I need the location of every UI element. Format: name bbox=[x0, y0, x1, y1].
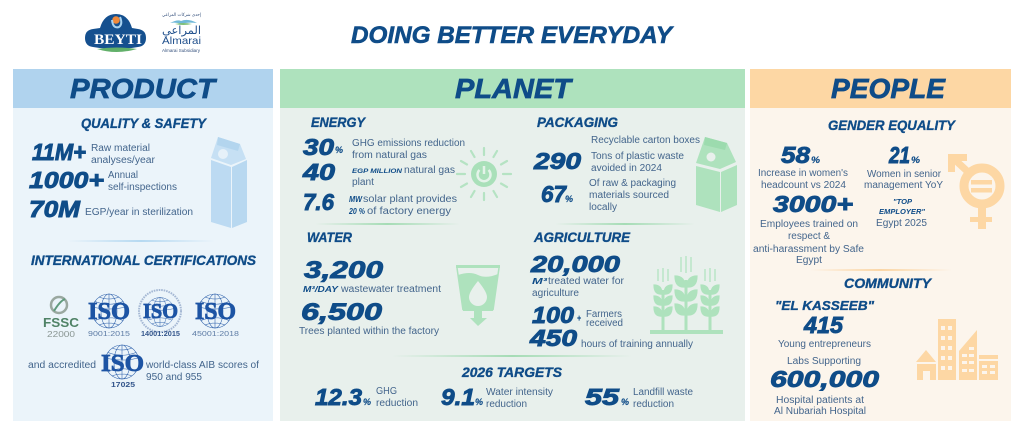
stat: 100+ bbox=[532, 302, 623, 329]
award: top employer: "TOP bbox=[893, 197, 913, 206]
stat: 3,200 bbox=[303, 257, 441, 295]
award: top employer: EMPLOYER" bbox=[879, 207, 925, 216]
stat: 7.6: of factory energy bbox=[367, 206, 451, 217]
certificate: ISO 45001 bbox=[192, 294, 239, 338]
stat: 7.6: solar plant provides bbox=[363, 194, 457, 205]
product header: PRODUCT bbox=[70, 73, 218, 104]
programme: El Kasseeb bbox=[775, 298, 875, 367]
certificate: ISO 45001: ISO bbox=[195, 299, 236, 325]
stat: 3,200: wastewater treatment bbox=[340, 284, 441, 295]
stat: 3000+: 3000+ bbox=[773, 191, 853, 217]
stat: 450: hours of training annually bbox=[581, 339, 693, 350]
target: water intensity bbox=[441, 384, 553, 410]
stat: 3,200: 3,200 bbox=[304, 257, 384, 284]
stat: 58%: 58 bbox=[781, 142, 810, 168]
stat: 40 bbox=[302, 159, 455, 188]
stat: 6,500 bbox=[299, 299, 439, 337]
stat: 21%: % bbox=[911, 155, 920, 165]
certificate: ISO 14001: 14001:2015 bbox=[141, 331, 180, 338]
people header bbox=[750, 69, 1011, 108]
heading: community: COMMUNITY bbox=[844, 276, 933, 291]
target: water intensity: reduction bbox=[486, 399, 527, 410]
stat: 290: avoided in 2024 bbox=[591, 163, 663, 174]
target: GHG bbox=[315, 384, 418, 410]
award: top employer bbox=[876, 197, 927, 229]
stat: 67%: % bbox=[565, 194, 573, 204]
logo: Beyti bbox=[85, 14, 146, 52]
text: AIB scores: world-class AIB scores of bbox=[145, 360, 259, 371]
heading: energy: ENERGY bbox=[311, 115, 367, 130]
stat: 21%: 21 bbox=[888, 142, 910, 168]
programme: El Kasseeb: Labs Supporting bbox=[787, 356, 861, 367]
stat: 20,000: treated water for bbox=[548, 276, 625, 287]
heading: agriculture: AGRICULTURE bbox=[533, 230, 631, 245]
panel: people bbox=[750, 69, 1011, 421]
stat: 58%: headcount vs 2024 bbox=[761, 180, 847, 191]
stat: 11M+: 11M+ bbox=[32, 139, 86, 165]
text: recyclable carton boxes: Recyclable carton boxes bbox=[591, 135, 700, 146]
target: landfill waste bbox=[585, 384, 693, 410]
certificate: ISO 14001 bbox=[139, 290, 181, 338]
stat: 450: 450 bbox=[529, 325, 577, 351]
stat: 30%: GHG emissions reduction bbox=[352, 138, 465, 149]
programme: El Kasseeb: 415 bbox=[803, 312, 844, 338]
stat: 30%: from natural gas bbox=[352, 150, 427, 161]
heading: water: WATER bbox=[307, 230, 352, 245]
target: landfill waste: % bbox=[621, 397, 629, 407]
stat: 3000+: anti-harassment by Safe bbox=[753, 244, 864, 255]
certificate: ISO 17025: ISO bbox=[101, 351, 144, 377]
stat: 67% bbox=[541, 178, 676, 213]
stat: 67%: locally bbox=[589, 202, 617, 213]
stat: 70M bbox=[29, 196, 193, 222]
award: top employer: Egypt 2025 bbox=[876, 218, 927, 229]
certificate: FSSC 22000: FSSC bbox=[43, 316, 79, 330]
stat: 20,000 bbox=[530, 251, 625, 299]
target: GHG: GHG bbox=[376, 386, 397, 397]
stat: 67%: Of raw & packaging bbox=[589, 178, 676, 189]
stat: 3000+: Egypt bbox=[796, 255, 822, 266]
title: DOING BETTER EVERYDAY bbox=[351, 22, 674, 49]
target: water intensity: % bbox=[475, 397, 483, 407]
panel: product bbox=[13, 69, 273, 421]
logo: Almarai: المراعي bbox=[162, 24, 201, 37]
logo: Almarai: إحدى شركات المراعي bbox=[162, 12, 201, 18]
stat: 67%: 67 bbox=[541, 181, 567, 207]
certificate: ISO 9001: 9001:2015 bbox=[88, 329, 130, 338]
stat: 290: Tons of plastic waste bbox=[591, 151, 684, 162]
stat: 21%: Women in senior bbox=[867, 169, 942, 180]
certificate: ISO 17025 bbox=[101, 345, 144, 389]
heading: 2026 targets: 2026 TARGETS bbox=[461, 365, 562, 380]
target: landfill waste: 55 bbox=[585, 384, 621, 410]
text: AIB scores bbox=[145, 360, 259, 383]
stat: 3000+ bbox=[753, 191, 864, 266]
icon: water cup bbox=[456, 265, 500, 326]
stat: 21% bbox=[864, 142, 944, 191]
programme: El Kasseeb: Young entrepreneurs bbox=[778, 339, 871, 350]
stat: 1000+: self-inspections bbox=[108, 182, 177, 193]
target: GHG: reduction bbox=[376, 398, 418, 409]
stat: 11M+: Raw material bbox=[91, 143, 150, 154]
logo: Beyti: BEYTI bbox=[94, 32, 142, 48]
logo: Almarai: Almarai bbox=[162, 35, 201, 47]
stat: 6,500: 6,500 bbox=[301, 299, 383, 326]
panel: planet bbox=[280, 69, 745, 421]
stat: 1000+ bbox=[29, 167, 177, 193]
icon: gender equality bbox=[948, 154, 1000, 229]
stat: 7.6: MW bbox=[349, 194, 363, 204]
stat: 40: plant bbox=[352, 177, 374, 188]
stat: 600,000 bbox=[770, 366, 879, 417]
icon: carton bbox=[696, 137, 737, 212]
heading: quality and safety: QUALITY & SAFETY bbox=[81, 116, 208, 131]
stat: 600,000: 600,000 bbox=[770, 366, 879, 392]
stat: 1000+: 1000+ bbox=[29, 167, 104, 193]
certificate: ISO 17025: 17025 bbox=[111, 380, 135, 389]
stat: 58%: Increase in women's bbox=[758, 168, 848, 179]
stat: 11M+: analyses/year bbox=[91, 155, 156, 166]
heading: packaging: PACKAGING bbox=[537, 115, 618, 130]
stat: 100+: + bbox=[577, 313, 582, 323]
stat: 58%: % bbox=[811, 155, 820, 165]
icon: milk carton bbox=[211, 137, 247, 228]
stat: 7.6 bbox=[303, 189, 457, 217]
heading: international certifications: INTERNATIONAL CERTIFICATIONS bbox=[31, 253, 256, 268]
stat: 67%: materials sourced bbox=[589, 190, 669, 201]
icon: wheat bbox=[650, 256, 723, 334]
target: water intensity: Water intensity bbox=[486, 387, 553, 398]
stat: 450 bbox=[529, 325, 693, 351]
target: landfill waste: reduction bbox=[633, 399, 674, 410]
stat: 58% bbox=[758, 142, 848, 191]
stat: 70M: 70M bbox=[29, 196, 81, 222]
stat: 20,000: 20,000 bbox=[530, 251, 620, 277]
certificate: ISO 9001: ISO bbox=[88, 299, 130, 325]
stat: 290 bbox=[533, 148, 684, 174]
icon: city buildings bbox=[916, 319, 998, 380]
product header bbox=[13, 69, 273, 108]
stat: 20,000: agriculture bbox=[532, 288, 579, 299]
heading: gender equality: GENDER EQUALITY bbox=[828, 118, 957, 133]
stat: 7.6: 7.6 bbox=[303, 189, 334, 215]
stat: 40: 40 bbox=[302, 159, 335, 185]
certificate: FSSC 22000: 22000 bbox=[47, 329, 75, 339]
stat: 3000+: Employees trained on bbox=[760, 219, 858, 230]
stat: 40: natural gas bbox=[404, 165, 455, 176]
stat: 30% bbox=[303, 134, 465, 161]
stat: 3,200: M³/DAY bbox=[303, 284, 339, 294]
stat: 600,000: Al Nubariah Hospital bbox=[774, 406, 866, 417]
target: GHG: % bbox=[363, 397, 371, 407]
target: water intensity: 9.1 bbox=[441, 384, 475, 410]
stat: 100+: 100 bbox=[532, 302, 574, 328]
stat: 20,000: M³ bbox=[532, 276, 549, 286]
stat: 21%: management YoY bbox=[864, 180, 944, 191]
logo: Almarai: Almarai Subsidiary bbox=[162, 48, 201, 53]
target: GHG: 12.3 bbox=[315, 384, 362, 410]
certificate: ISO 45001: 45001:2018 bbox=[192, 329, 239, 338]
text: and accredited: and accredited bbox=[28, 360, 96, 371]
stat: 40: EGP MILLION bbox=[352, 168, 402, 175]
logo: Almarai bbox=[162, 12, 201, 53]
stat: 30%: % bbox=[335, 145, 343, 155]
programme: El Kasseeb: "EL KASSEEB" bbox=[775, 298, 875, 313]
text: AIB scores: 950 and 955 bbox=[146, 372, 202, 383]
stat: 100+: Farmers bbox=[586, 309, 622, 320]
target: landfill waste: Landfill waste bbox=[633, 387, 693, 398]
planet header: PLANET bbox=[455, 73, 574, 104]
certificate: ISO 14001: ISO bbox=[143, 299, 178, 323]
icon: sun power bbox=[457, 148, 511, 200]
stat: 1000+: Annual bbox=[108, 170, 138, 181]
stat: 600,000: Hospital patients at bbox=[776, 395, 864, 406]
stat: 3000+: respect & bbox=[788, 231, 831, 242]
stat: 7.6: 20 % bbox=[348, 206, 365, 216]
planet header bbox=[280, 69, 745, 108]
stat: 100+: received bbox=[586, 318, 623, 329]
stat: 70M: EGP/year in sterilization bbox=[85, 207, 193, 218]
stat: 11M+ bbox=[32, 139, 156, 166]
people header: PEOPLE bbox=[831, 73, 946, 104]
certificate: ISO 9001 bbox=[88, 294, 130, 338]
stat: 30%: 30 bbox=[303, 134, 334, 160]
certificate: FSSC 22000 bbox=[43, 297, 79, 339]
stat: 290: 290 bbox=[533, 148, 581, 174]
stat: 6,500: Trees planted within the factory bbox=[299, 326, 439, 337]
